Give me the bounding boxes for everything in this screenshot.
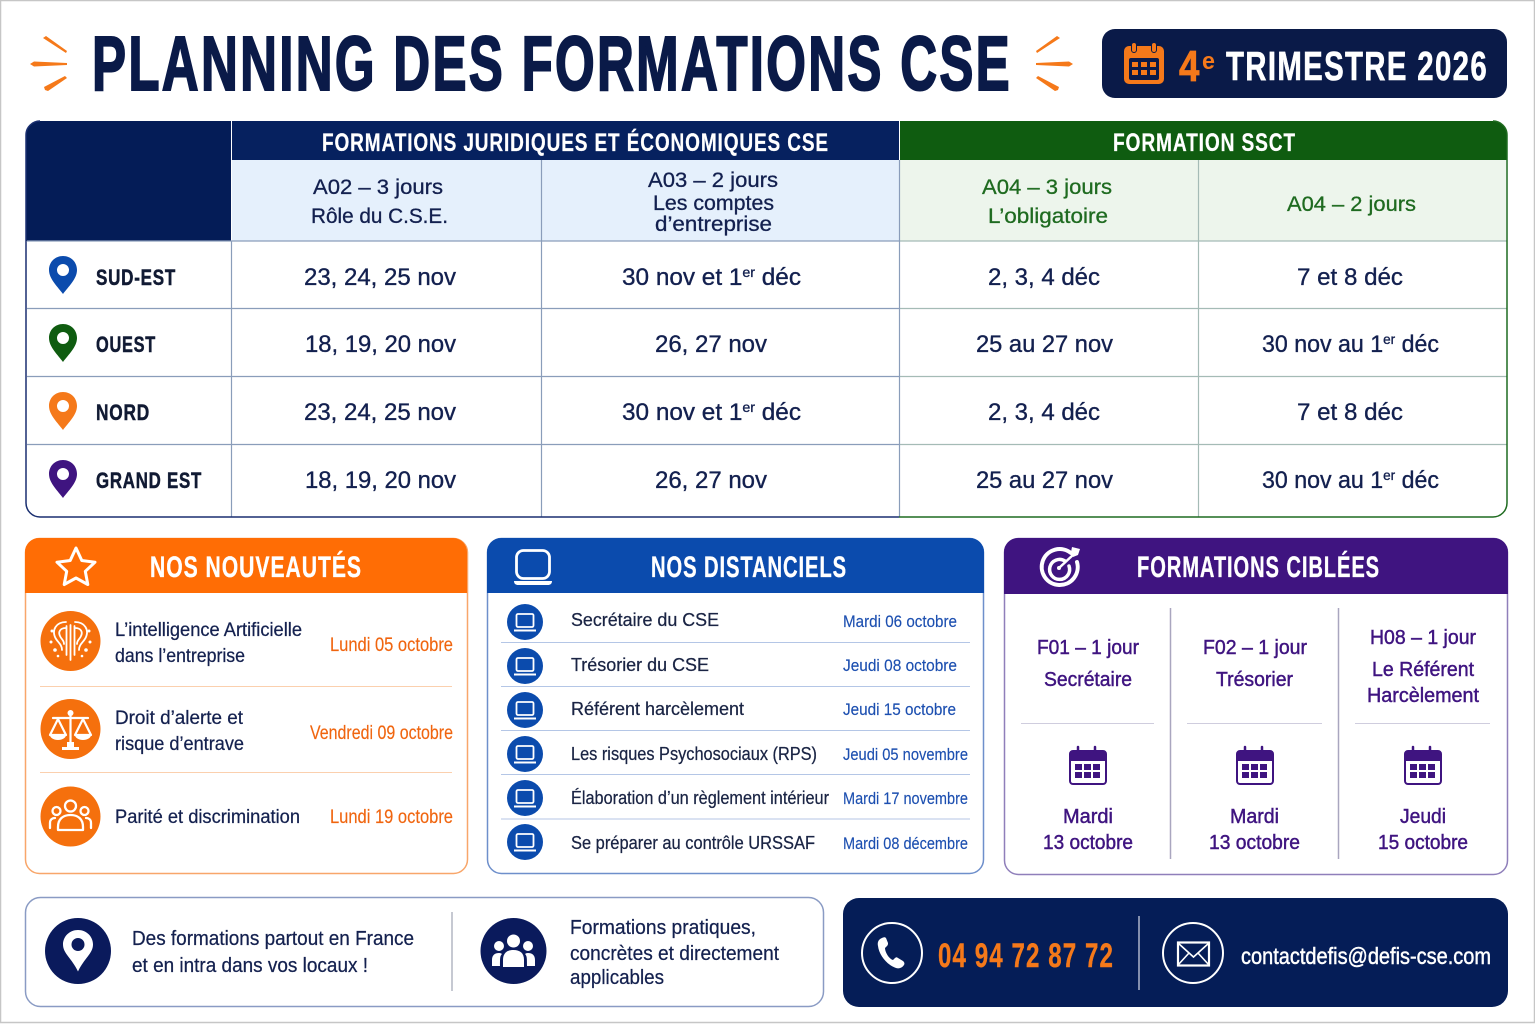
item: RPS: Jeudi 05 novembre xyxy=(843,745,968,764)
row: Grand Est: 30 nov au 1 xyxy=(1262,467,1387,494)
item: secrétaire xyxy=(507,604,957,640)
row: Ouest: 26, 27 nov xyxy=(655,331,767,358)
item: URSSAF: Mardi 08 décembre xyxy=(843,834,968,853)
item: secrétaire: Secrétaire du CSE xyxy=(571,610,719,630)
badge label xyxy=(1179,42,1488,91)
item: droit d'alerte: Droit d’alerte et xyxy=(115,708,244,729)
row: Ouest: 25 au 27 nov xyxy=(976,331,1113,358)
icon: AI brain xyxy=(40,611,100,671)
row: Nord: 2, 3, 4 déc xyxy=(988,399,1100,426)
column: H08: Le Référent xyxy=(1372,659,1474,681)
subheader: A02 xyxy=(232,160,541,241)
badge: 4e trimestre 2026 xyxy=(1102,29,1507,98)
icon: laptop xyxy=(514,550,552,585)
subheader: A02: Rôle du C.S.E. xyxy=(311,205,448,228)
row: Grand Est xyxy=(49,460,1439,498)
text: formations pratiques: applicables xyxy=(570,967,664,989)
icon: laptop badge xyxy=(507,780,543,816)
column: F01: Secrétaire xyxy=(1044,669,1132,691)
panel header: blue band xyxy=(487,538,984,593)
panel: contact footer xyxy=(843,898,1508,1007)
row: Nord: 30 nov et 1 xyxy=(622,399,741,426)
table header: SSCT xyxy=(900,121,1507,160)
email: contactdefis@defis-cse.com xyxy=(1241,943,1491,969)
icon: star xyxy=(57,548,95,584)
row: Sud-Est: 7 et 8 déc xyxy=(1297,264,1403,291)
item: trésorier xyxy=(507,648,957,684)
item: secrétaire: Mardi 06 octobre xyxy=(843,612,957,631)
item: droit d'alerte: Vendredi 09 octobre xyxy=(310,723,453,744)
panel header: purple band xyxy=(1004,538,1508,594)
row: Sud-Est: 30 nov et 1 xyxy=(622,264,741,291)
row: Grand Est: déc xyxy=(1395,467,1439,494)
row: Sud-Est: 2, 3, 4 déc xyxy=(988,264,1100,291)
item: trésorier: Trésorier du CSE xyxy=(571,655,709,675)
table header: juridiques xyxy=(232,121,899,160)
icon: laptop badge xyxy=(507,736,543,772)
subheader: A04 2 jours: A04 – 2 jours xyxy=(1287,193,1416,216)
item: droit d'alerte xyxy=(40,699,453,759)
subheader: A04 3 jours: L’obligatoire xyxy=(988,205,1108,228)
text: partout en France: Des formations partout en France xyxy=(132,928,414,950)
item: parité: Parité et discrimination xyxy=(115,807,300,828)
icon: people xyxy=(40,786,100,846)
table header: corner cell xyxy=(26,121,231,241)
icon: orange pin xyxy=(49,392,77,430)
icon: laptop badge xyxy=(507,604,543,640)
row: Grand Est: GRAND EST xyxy=(96,468,202,493)
item: intelligence artificielle: Lundi 05 octobre xyxy=(330,635,453,656)
phone number: 04 94 72 87 72 xyxy=(938,937,1114,975)
item: RPS xyxy=(507,736,968,772)
panel: nos nouveautés xyxy=(25,538,468,874)
row: Sud-Est: er xyxy=(742,264,755,280)
row: Grand Est: 18, 19, 20 nov xyxy=(305,467,456,494)
panel: info footer xyxy=(26,898,824,1006)
item: parité: Lundi 19 octobre xyxy=(330,807,453,828)
column: F02: F02 – 1 jour xyxy=(1203,637,1307,659)
row: Sud-Est: déc xyxy=(755,264,801,291)
title group xyxy=(30,21,1073,107)
table header: juridiques: FORMATIONS JURIDIQUES ET ÉCONOMIQUES CSE xyxy=(322,128,829,157)
table header: SSCT: FORMATION SSCT xyxy=(1113,129,1296,157)
badge label: 4 xyxy=(1179,42,1201,91)
column: F01 xyxy=(1037,637,1139,854)
item: règlement intérieur: Mardi 17 novembre xyxy=(843,789,968,808)
column: F02 xyxy=(1203,637,1307,854)
item: droit d'alerte: risque d’entrave xyxy=(115,734,244,755)
panel: nos distanciels xyxy=(487,538,984,874)
icon: calendar xyxy=(1405,747,1441,784)
text: partout en France xyxy=(132,928,414,977)
subheader: A03: d’entreprise xyxy=(655,213,772,236)
row: Nord xyxy=(49,392,1403,430)
item: parité xyxy=(40,786,453,846)
column: F02: Mardi xyxy=(1230,806,1279,828)
icon: right orange rays xyxy=(1036,36,1073,91)
schedule table xyxy=(26,121,1507,517)
row: Ouest: er xyxy=(1383,331,1395,347)
column: F01: Mardi xyxy=(1063,806,1113,828)
row: Ouest: OUEST xyxy=(96,332,156,357)
row: Ouest xyxy=(49,324,1439,362)
row: Nord: 23, 24, 25 nov xyxy=(304,399,456,426)
item: intelligence artificielle: dans l’entreprise xyxy=(115,646,245,667)
icon: laptop badge xyxy=(507,824,543,860)
column: F01: F01 – 1 jour xyxy=(1037,637,1139,659)
badge label: e xyxy=(1202,48,1216,75)
icon: mail xyxy=(1163,923,1223,983)
item: référent: Jeudi 15 octobre xyxy=(843,700,956,719)
column: H08: Jeudi xyxy=(1400,806,1446,828)
item: URSSAF: Se préparer au contrôle URSSAF xyxy=(571,833,815,853)
row: Grand Est: 25 au 27 nov xyxy=(976,467,1113,494)
heading: NOS DISTANCIELS xyxy=(651,551,847,584)
icon: left orange rays xyxy=(30,36,67,91)
row: Ouest: 18, 19, 20 nov xyxy=(305,331,456,358)
text: formations pratiques: concrètes et directement xyxy=(570,943,779,965)
item: règlement intérieur xyxy=(507,780,968,816)
item: trésorier: Jeudi 08 octobre xyxy=(843,656,957,675)
item: règlement intérieur: Élaboration d’un règlement intérieur xyxy=(571,788,829,808)
subheader: A03: A03 – 2 jours xyxy=(648,169,778,192)
column: H08: Harcèlement xyxy=(1367,685,1479,707)
icon: green pin xyxy=(49,324,77,362)
subheader: A03: Les comptes xyxy=(653,192,774,215)
icon: laptop badge xyxy=(507,648,543,684)
item: RPS: Les risques Psychosociaux (RPS) xyxy=(571,744,817,764)
row: Ouest: déc xyxy=(1395,331,1439,358)
column: H08 xyxy=(1367,627,1479,854)
heading: NOS NOUVEAUTÉS xyxy=(150,550,362,584)
column: H08: 15 octobre xyxy=(1378,832,1468,854)
icon: target xyxy=(1042,547,1080,585)
row: Nord: déc xyxy=(755,399,801,426)
subheader: A04 2 jours xyxy=(1199,160,1506,241)
icon: laptop badge xyxy=(507,692,543,728)
icon: calendar xyxy=(1070,747,1106,784)
row: Sud-Est: SUD-EST xyxy=(96,265,176,290)
item: intelligence artificielle xyxy=(40,611,453,671)
icon: scales xyxy=(40,699,100,759)
column: H08: H08 – 1 jour xyxy=(1370,627,1476,649)
icon: phone xyxy=(862,923,922,983)
heading: FORMATIONS CIBLÉES xyxy=(1137,550,1380,584)
subheader: A02: A02 – 3 jours xyxy=(313,176,443,199)
icon: location circle xyxy=(45,918,111,984)
row: Grand Est: 26, 27 nov xyxy=(655,467,767,494)
icon: calendar xyxy=(1237,747,1273,784)
text: formations pratiques: Formations pratiques, xyxy=(570,917,756,939)
panel: formations ciblées xyxy=(1004,538,1508,874)
column: F02: 13 octobre xyxy=(1209,832,1300,854)
column: F01: 13 octobre xyxy=(1043,832,1133,854)
row: Nord: 7 et 8 déc xyxy=(1297,399,1403,426)
column: F02: Trésorier xyxy=(1216,669,1293,691)
row: Sud-Est xyxy=(49,256,1403,294)
item: référent: Référent harcèlement xyxy=(571,699,744,719)
icon: blue pin xyxy=(49,256,77,294)
item: URSSAF xyxy=(507,824,968,860)
title: PLANNING DES FORMATIONS CSE xyxy=(92,21,1012,107)
item: référent xyxy=(507,692,956,728)
text: formations pratiques xyxy=(570,917,779,989)
panel header: orange band xyxy=(25,538,467,593)
row: Nord: er xyxy=(742,399,755,415)
subheader: A04 3 jours xyxy=(900,160,1198,241)
item: intelligence artificielle: L’intelligence Artificielle xyxy=(115,620,302,641)
row: Sud-Est: 23, 24, 25 nov xyxy=(304,264,456,291)
text: partout en France: et en intra dans vos locaux ! xyxy=(132,955,368,977)
row: Nord: NORD xyxy=(96,400,150,425)
icon: orange calendar xyxy=(1124,42,1164,84)
icon: purple pin xyxy=(49,460,77,498)
row: Ouest: 30 nov au 1 xyxy=(1262,331,1387,358)
icon: group circle xyxy=(480,918,546,984)
subheader: A03 xyxy=(542,160,899,241)
subheader: A04 3 jours: A04 – 3 jours xyxy=(982,176,1112,199)
row: Grand Est: er xyxy=(1383,467,1395,483)
